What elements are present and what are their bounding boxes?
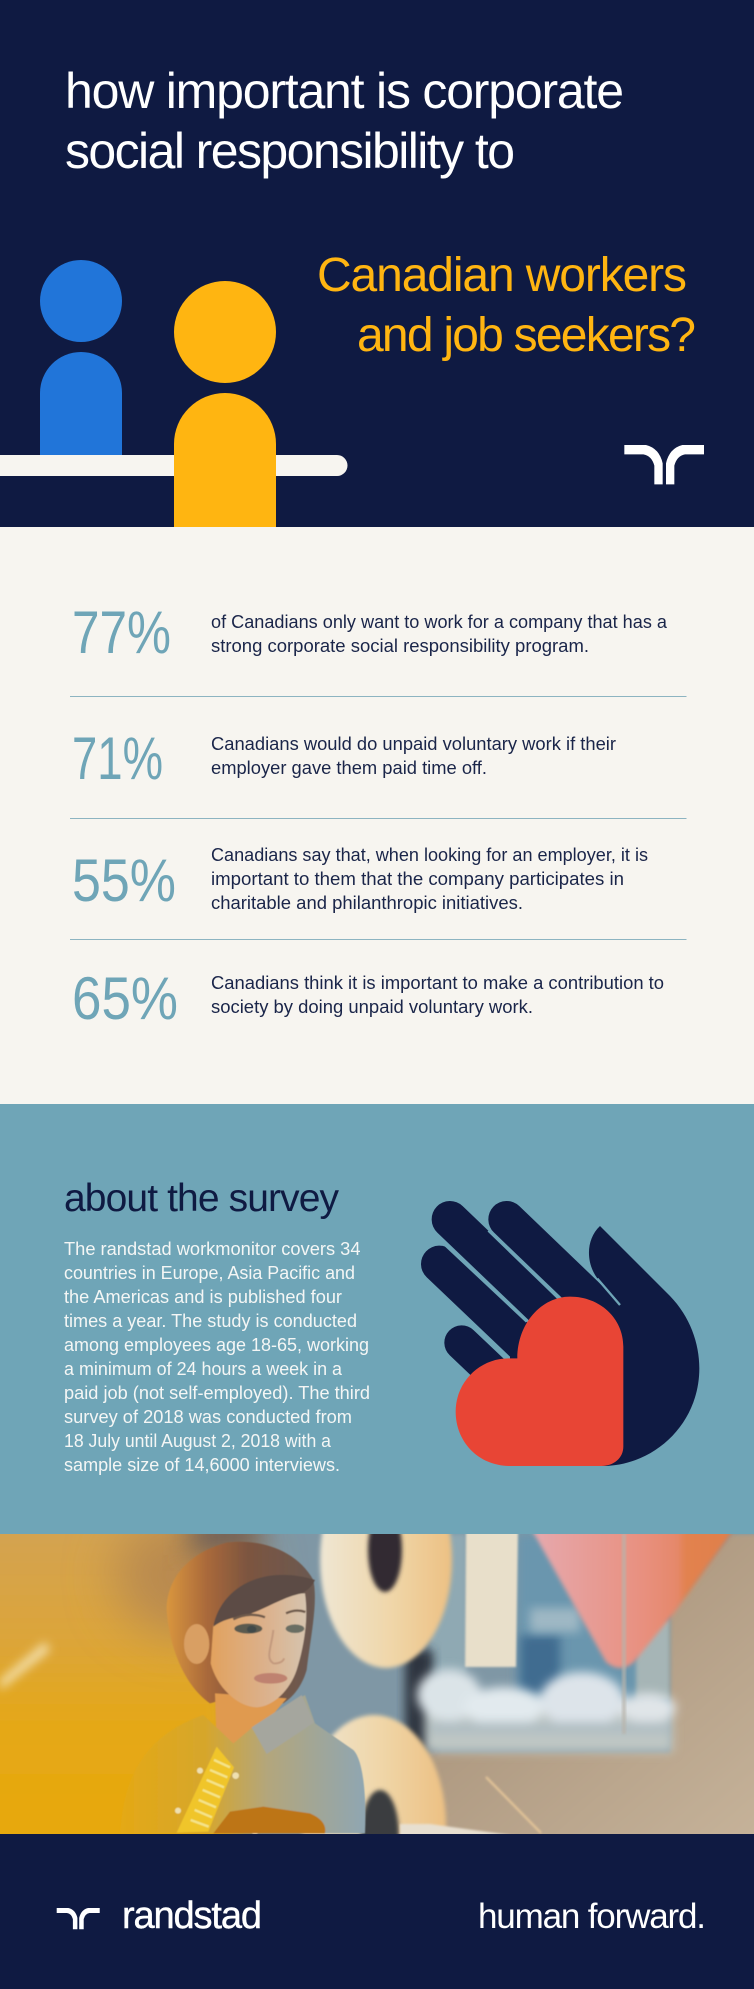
photo background xyxy=(0,1534,754,1834)
survey description text xyxy=(64,1239,370,1475)
icon: blue person xyxy=(40,260,122,456)
stat: 77%: of Canadians only want to work for a company that has a xyxy=(211,612,668,632)
stat: 71%: Canadians would do unpaid voluntary work if their xyxy=(211,734,616,754)
survey description text: times a year. The study is conducted xyxy=(64,1311,357,1331)
icon: hand holding heart xyxy=(439,1219,699,1466)
stat: 55%: 55% xyxy=(72,847,176,914)
tagline: human forward. xyxy=(478,1897,706,1936)
title: white lines: social responsibility to xyxy=(65,123,515,179)
stat: 65% xyxy=(72,965,664,1032)
stat: 55%: charitable and philanthropic initiatives. xyxy=(211,893,523,913)
survey description text: The randstad workmonitor covers 34 xyxy=(64,1239,360,1259)
stat: 77%: 77% xyxy=(72,599,171,666)
eyes and brows xyxy=(233,1611,305,1634)
cream panel xyxy=(465,1530,518,1667)
header panel xyxy=(0,0,754,527)
face xyxy=(211,1593,306,1707)
survey description text: among employees age 18-65, working xyxy=(64,1335,369,1355)
randstad logo: randstad xyxy=(122,1895,262,1937)
woman xyxy=(120,1542,365,1835)
striped top xyxy=(177,1747,234,1833)
stat: 77%: strong corporate social responsibility program. xyxy=(211,636,589,656)
survey description text: countries in Europe, Asia Pacific and xyxy=(64,1263,355,1283)
stat: 71% xyxy=(72,725,616,792)
lips xyxy=(254,1673,287,1684)
stat: 55%: important to them that the company participates in xyxy=(211,869,624,889)
title: white lines: how important is corporate xyxy=(65,63,624,119)
title: white lines xyxy=(65,63,624,179)
buttons xyxy=(175,1768,258,1835)
neck xyxy=(214,1693,287,1744)
randstad logo xyxy=(57,1895,262,1937)
blurred disc, top xyxy=(317,1534,455,1671)
survey description text: the Americas and is published four xyxy=(64,1287,342,1307)
stat: 65%: Canadians think it is important to make a contribution to xyxy=(211,973,664,993)
icon: randstad logo mark xyxy=(624,445,704,484)
panel: about the survey xyxy=(0,1104,754,1534)
jacket and shirt xyxy=(120,1695,365,1833)
desk bar xyxy=(0,455,348,476)
stat: 71%: 71% xyxy=(72,725,163,792)
heading: about the survey: about the survey xyxy=(64,1177,340,1220)
stat: 65%: society by doing unpaid voluntary work. xyxy=(211,997,533,1017)
glass line xyxy=(622,1534,626,1734)
survey description text: 18 July until August 2, 2018 with a xyxy=(64,1431,332,1451)
title: yellow lines: Canadian workers xyxy=(317,249,687,302)
stat: 55% xyxy=(72,845,648,914)
icon: yellow person xyxy=(174,281,276,527)
blurred disc, bottom xyxy=(300,1712,510,1834)
collar xyxy=(252,1695,314,1754)
title: yellow lines xyxy=(317,249,696,362)
light streak xyxy=(486,1777,541,1833)
hand xyxy=(439,1219,699,1466)
title: yellow lines: and job seekers? xyxy=(357,309,696,362)
pink triangle xyxy=(532,1530,734,1668)
stat: 71%: employer gave them paid time off. xyxy=(211,758,487,778)
stat: 77% xyxy=(72,599,668,666)
survey description text: sample size of 14,6000 interviews. xyxy=(64,1455,340,1475)
survey description text: survey of 2018 was conducted from xyxy=(64,1407,352,1427)
ear xyxy=(184,1624,209,1664)
hair back xyxy=(167,1542,315,1703)
stat: 65%: 65% xyxy=(72,965,178,1032)
survey description text: paid job (not self-employed). The third xyxy=(64,1383,370,1403)
bangs xyxy=(213,1575,315,1627)
stat: 55%: Canadians say that, when looking for an employer, it is xyxy=(211,845,648,865)
hair on chest xyxy=(213,1807,325,1833)
panel: statistics xyxy=(0,527,754,1104)
heart xyxy=(456,1297,623,1466)
nose shadow xyxy=(269,1630,284,1663)
survey description text: a minimum of 24 hours a week in a xyxy=(64,1359,343,1379)
logo mark xyxy=(57,1908,100,1929)
footer panel xyxy=(0,1834,754,1989)
white blurred cups xyxy=(417,1669,676,1752)
photo: woman looking over her shoulder xyxy=(0,1534,754,1834)
